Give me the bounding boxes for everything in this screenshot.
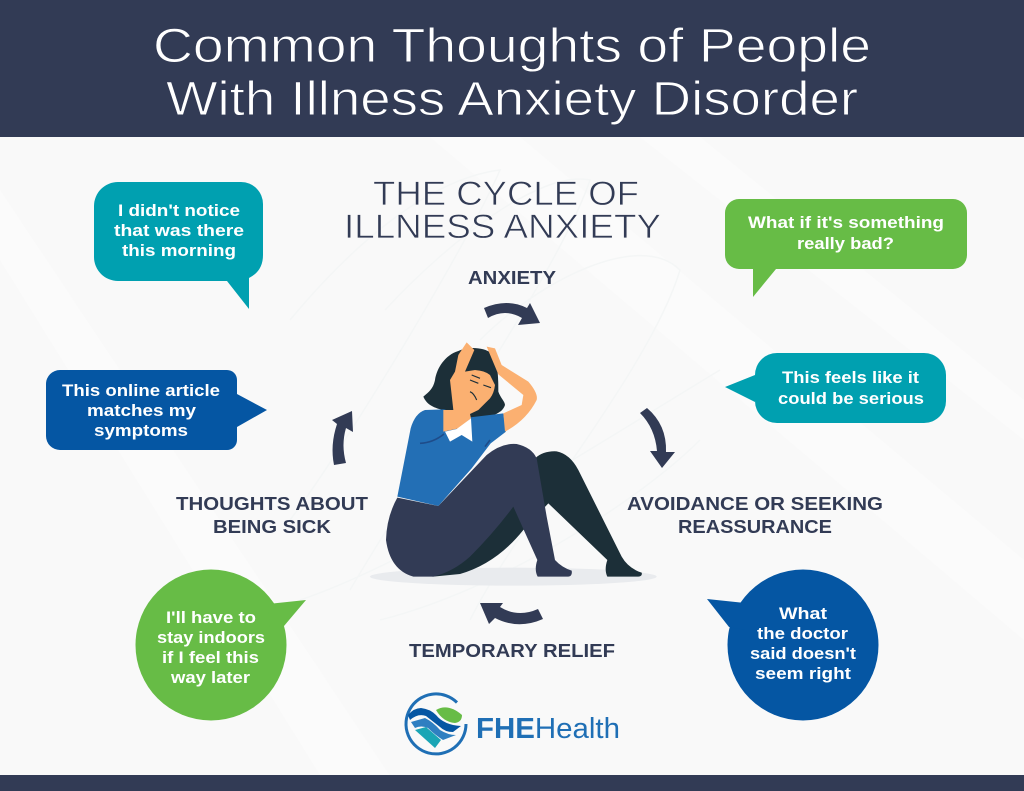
sleeve shading — [420, 434, 490, 447]
label: thoughts: BEING SICK — [213, 517, 331, 537]
bubble: stay indoors: way later — [170, 669, 251, 687]
label: thoughts — [176, 494, 368, 537]
footer band — [0, 775, 1024, 791]
arrow: top — [484, 303, 540, 325]
bubble: doctor: the doctor — [757, 625, 849, 643]
label: anxiety: ANXIETY — [468, 268, 556, 288]
face and forearm — [443, 342, 495, 432]
label: thoughts: THOUGHTS ABOUT — [176, 494, 368, 514]
arrow: right — [640, 408, 675, 468]
label: temporary relief: TEMPORARY RELIEF — [409, 641, 615, 661]
bubble: doctor: seem right — [755, 665, 852, 683]
label: avoidance: REASSURANCE — [678, 517, 832, 537]
bubble: didn't notice: this morning — [122, 242, 236, 260]
hair — [423, 348, 505, 418]
subtitle: THE CYCLE OF — [373, 175, 639, 213]
bubble: online article — [46, 370, 267, 450]
bubble: doctor — [707, 570, 878, 720]
bubble: online article: matches my — [87, 402, 197, 420]
bubble: didn't notice: I didn't notice — [118, 202, 240, 220]
bubble: could be serious: could be serious — [778, 390, 924, 408]
bubble: online article: symptoms — [94, 422, 188, 440]
logo: FHE Health — [406, 694, 620, 754]
front leg — [386, 444, 572, 577]
floor shadow — [370, 568, 657, 586]
collar — [445, 418, 472, 442]
shirt — [397, 409, 506, 506]
logo wordmark: FHEHealth — [476, 713, 620, 745]
bubble: doctor: said doesn't — [750, 645, 857, 663]
bubble: something really bad: What if it's something — [748, 214, 944, 232]
bubble: could be serious — [725, 353, 946, 423]
face features — [470, 375, 491, 400]
arrow: bottom — [480, 603, 543, 624]
logo ring — [406, 694, 466, 754]
subtitle: ILLNESS ANXIETY — [344, 208, 661, 246]
bubble: doctor: What — [779, 605, 828, 623]
bubble: stay indoors — [136, 570, 306, 720]
logo waves — [408, 708, 461, 732]
logo leaf — [436, 707, 462, 723]
bubble: stay indoors: I'll have to — [166, 609, 256, 627]
bubble: stay indoors: if I feel this — [162, 649, 259, 667]
title: With Illness Anxiety Disorder — [166, 73, 858, 126]
arm right — [487, 347, 537, 432]
bubble: could be serious: This feels like it — [782, 369, 920, 387]
label: avoidance — [627, 494, 883, 537]
bubble: online article: This online article — [62, 382, 220, 400]
bubble: didn't notice: that was there — [114, 222, 244, 240]
back leg — [413, 451, 642, 577]
bubble: something really bad: really bad? — [797, 235, 894, 253]
title — [153, 20, 871, 126]
arrow: left — [332, 411, 353, 465]
label: avoidance: AVOIDANCE OR SEEKING — [627, 494, 883, 514]
bubble: something really bad — [725, 199, 967, 297]
title: Common Thoughts of People — [153, 20, 871, 73]
bubble: didn't notice — [94, 182, 263, 309]
header band — [0, 0, 1024, 137]
bubble: stay indoors: stay indoors — [157, 629, 265, 647]
subtitle — [344, 175, 661, 246]
figure: anxious woman — [370, 342, 657, 586]
